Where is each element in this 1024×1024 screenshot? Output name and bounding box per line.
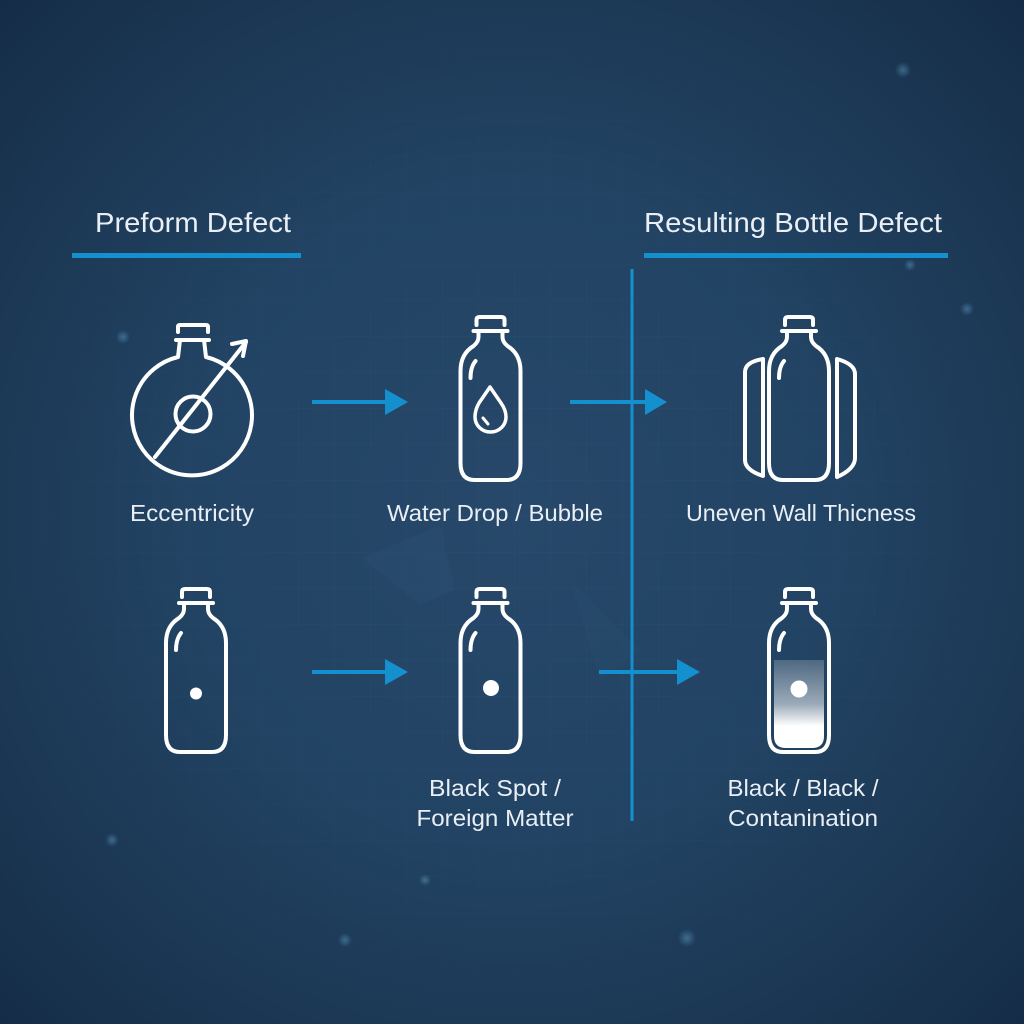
label: Uneven Wall Thicness: Uneven Wall Thicness (686, 500, 916, 526)
icon: bottle with uneven walls (745, 317, 855, 480)
icon: bottle with water drop (460, 317, 520, 480)
label: Black / Black / Contanination: Contanination (728, 805, 878, 831)
heading: Resulting Bottle Defect: Resulting Bottle Defect (644, 207, 942, 238)
vertical divider (630, 269, 634, 821)
label: Black Spot / Foreign Matter: Black Spot / (429, 775, 562, 801)
label: Black Spot / Foreign Matter: Foreign Matter (416, 805, 574, 831)
label: Water Drop / Bubble: Water Drop / Bubble (387, 500, 603, 526)
arrow: row 2 first (312, 659, 408, 685)
icon: bottle with small spot (166, 589, 226, 752)
label: Black / Black / Contanination (728, 775, 879, 831)
label: Black / Black / Contanination: Black / Black / (728, 775, 879, 801)
icon: bottle with black spot (460, 589, 520, 752)
icon: bottle with contamination gradient (769, 589, 829, 752)
label: Eccentricity: Eccentricity (130, 500, 255, 526)
arrow: row 1 second (570, 389, 667, 415)
arrow: row 2 second (599, 659, 700, 685)
heading: Preform Defect (72, 207, 301, 258)
icon: eccentricity flask (132, 325, 252, 475)
heading: Resulting Bottle Defect (644, 207, 948, 258)
label: Black Spot / Foreign Matter (416, 775, 574, 831)
arrow: row 1 first (312, 389, 408, 415)
heading: Preform Defect: Preform Defect (95, 207, 291, 238)
